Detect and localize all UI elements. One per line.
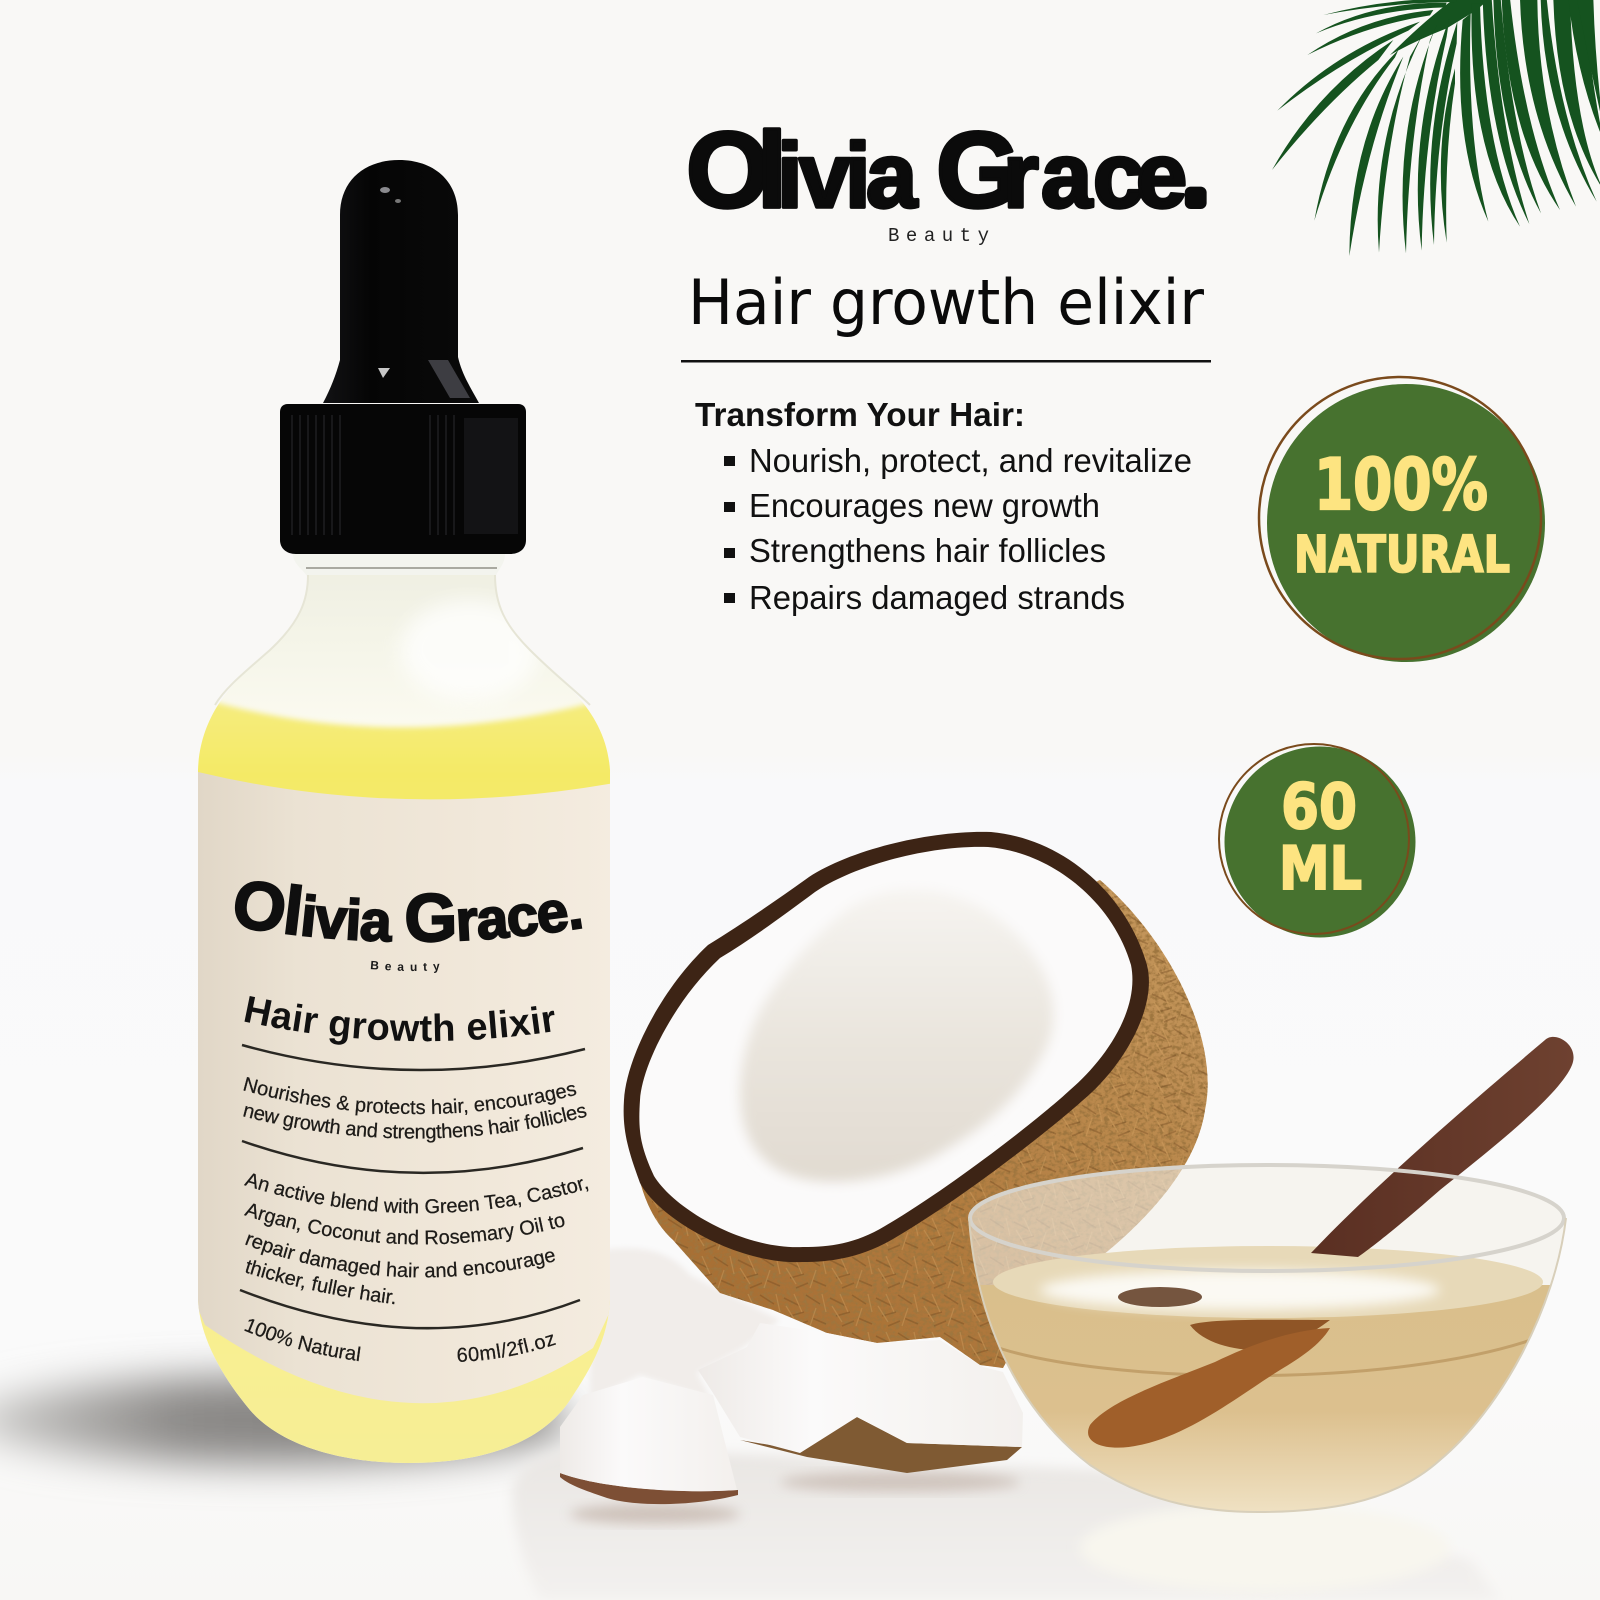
label text: repair damaged hair and encourage	[245, 1234, 555, 1278]
dropper bulb	[323, 160, 479, 403]
brand logo: .	[1186, 140, 1205, 218]
label text: 60ml/2fl.oz	[458, 1334, 556, 1362]
brand logo: e	[1136, 125, 1187, 227]
label text	[234, 881, 588, 1362]
badge: 60 ml	[1219, 744, 1416, 938]
glass neck	[293, 554, 505, 580]
benefits list: Transform Your Hair:	[695, 396, 1025, 433]
brand logo: Beauty	[888, 225, 989, 247]
palm leaf	[1272, 0, 1600, 256]
spoon refraction	[1190, 1320, 1330, 1350]
badge: 100% natural: NATURAL	[1294, 526, 1510, 585]
bottle	[190, 160, 620, 1480]
badge: 60 ml: 60	[1281, 770, 1357, 843]
badge: 100% natural: 100%	[1314, 444, 1488, 526]
brand logo: l	[757, 109, 787, 230]
floor reflections	[512, 1449, 1500, 1600]
label text: thicker, fuller hair.	[246, 1260, 394, 1304]
chunk flesh	[698, 1323, 1023, 1453]
coconut piece: back	[590, 1248, 780, 1400]
bowl of oil	[960, 1037, 1580, 1515]
benefits list	[695, 396, 1192, 616]
chunk skin	[560, 1473, 738, 1504]
coconut husk	[634, 880, 1208, 1368]
brand logo: v	[799, 125, 850, 227]
spoon shadow on surface	[1118, 1287, 1202, 1307]
coconut flesh	[639, 847, 1132, 1247]
bowl band	[1000, 1340, 1528, 1377]
brand logo: i	[845, 125, 871, 227]
brand logo: a	[1041, 125, 1093, 227]
product title: Hair growth elixir	[688, 266, 1204, 339]
label text: Argan, Coconut and Rosemary Oil to	[244, 1204, 564, 1245]
cap side panel	[464, 418, 518, 534]
label text: Beauty	[370, 960, 440, 973]
coconut chunk: front	[560, 1377, 738, 1504]
benefits list: Repairs damaged strands	[749, 579, 1125, 616]
spoon handle	[1311, 1037, 1574, 1257]
coconut chunk: large	[698, 1323, 1023, 1473]
label text: 100% Natural	[244, 1319, 361, 1362]
chunk husk	[740, 1417, 1022, 1473]
brand logo: i	[777, 125, 803, 227]
husk fibres	[634, 880, 1208, 1368]
label text: Nourishes & protects hair, encourages	[244, 1077, 576, 1116]
chunk flesh	[560, 1377, 737, 1491]
brand logo: a	[866, 125, 918, 227]
bowl glass	[969, 1163, 1566, 1512]
coconut rim	[624, 832, 1149, 1262]
oil	[190, 695, 620, 1480]
glass body	[190, 570, 620, 1480]
badge: 60 ml: ML	[1279, 834, 1362, 904]
brand logo: r	[1003, 125, 1039, 227]
oil body	[960, 1285, 1580, 1515]
badge: 100% natural	[1259, 377, 1545, 662]
benefits list: Strengthens hair follicles	[749, 532, 1106, 569]
label text: Hair growth elixir	[244, 996, 554, 1045]
shoulder glow	[400, 600, 540, 700]
label	[190, 770, 620, 1403]
benefits list: Nourish, protect, and revitalize	[749, 442, 1192, 479]
screw cap	[280, 404, 526, 554]
title rule	[681, 360, 1211, 362]
bowl rim	[970, 1165, 1564, 1271]
spoon head	[1088, 1328, 1330, 1448]
label text: An active blend with Green Tea, Castor,	[244, 1173, 588, 1214]
benefits list: Encourages new growth	[749, 487, 1100, 524]
bottle shadow on floor	[0, 1376, 570, 1464]
oil surface	[993, 1246, 1543, 1318]
brand logo: O	[686, 109, 770, 230]
brand logo: G	[936, 109, 1020, 230]
brand logo: c	[1093, 125, 1144, 227]
coconut half	[624, 832, 1208, 1368]
surface gleam	[1040, 1270, 1440, 1310]
brand logo	[686, 109, 1205, 247]
coconut cavity	[740, 889, 1054, 1182]
label text: new growth and strengthens hair follicles	[243, 1106, 587, 1143]
label text: Olivia Grace.	[234, 881, 582, 943]
neck seam	[306, 567, 497, 569]
shoulder outline	[215, 575, 590, 705]
bulb highlights	[378, 187, 470, 398]
cap ribs	[292, 415, 454, 535]
